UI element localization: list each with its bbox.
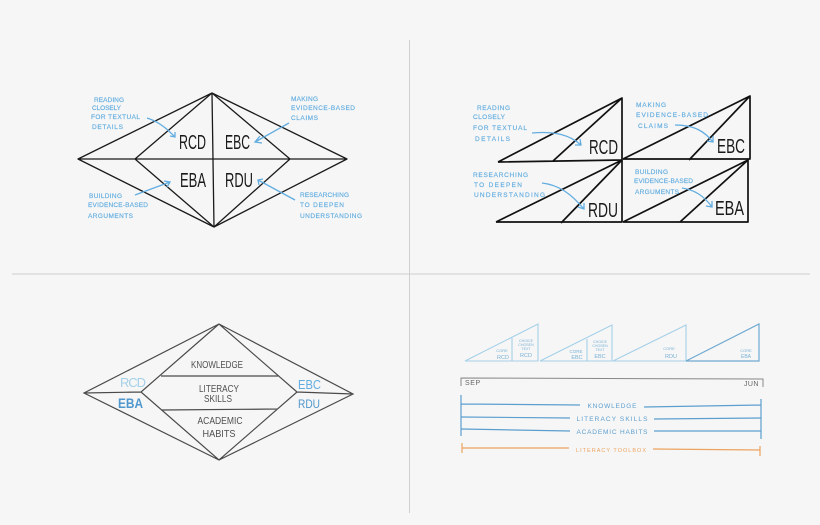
label: EBA: EBA: [118, 396, 143, 411]
panel: four triangles: [473, 96, 750, 223]
note: building evidence-based arguments: EVIDENCE-BASED: [88, 202, 148, 209]
note: researching to deepen understanding: UNDERSTANDING: [300, 213, 362, 220]
triangle: core and choice RCD: TEXT: [521, 347, 531, 351]
bar: literacy skills: LITERACY SKILLS: [576, 416, 648, 423]
triangle: EBA: [623, 160, 748, 222]
triangle: core and choice RCD: RCD: [497, 355, 509, 361]
panel: year timeline: [461, 324, 763, 456]
label: RCD: RCD: [589, 137, 618, 159]
triangle: core and choice EBC: CHOICE: [593, 340, 608, 344]
label: EBC: EBC: [717, 136, 745, 158]
triangle: core EBA: CORE: [740, 348, 752, 353]
bar: knowledge: KNOWLEDGE: [588, 403, 637, 410]
note: building evidence-based arguments: ARGUMENTS: [635, 189, 680, 196]
panel: diamond with four skill areas: [78, 93, 362, 227]
triangle: core and choice RCD: RCD: [520, 353, 532, 359]
note: making evidence-based claims: EVIDENCE-BASED: [636, 112, 708, 119]
label: JUN: JUN: [744, 381, 759, 388]
note: researching to deepen understanding: UNDERSTANDING: [474, 192, 545, 199]
note: researching to deepen understanding: TO DEEPEN: [300, 202, 344, 209]
timeline bracket: [461, 378, 763, 387]
note: building evidence-based arguments: BUILDING: [635, 169, 668, 176]
triangle: core EBA: [686, 324, 759, 361]
label: RCD: RCD: [120, 375, 146, 390]
label: RCD: RCD: [179, 132, 206, 154]
triangle: EBC: [623, 96, 750, 160]
note: building evidence-based arguments: EVIDENCE-BASED: [634, 178, 693, 185]
note: reading closely: DETAILS: [92, 124, 124, 131]
triangle: core RDU: [613, 325, 686, 361]
note: researching to deepen understanding: RESEARCHING: [473, 172, 528, 179]
triangle: core and choice RCD: CHOSEN: [518, 343, 534, 347]
arrow: to RCD: [147, 118, 175, 137]
note: researching to deepen understanding: TO DEEPEN: [474, 182, 522, 189]
label: RDU: RDU: [298, 397, 320, 411]
label: academic habits: ACADEMIC: [198, 415, 243, 427]
arrow: to EBC: [255, 123, 289, 143]
label: EBA: EBA: [715, 198, 744, 220]
bar: knowledge: [461, 395, 761, 439]
arrow: to RCD: [532, 132, 581, 145]
triangle: core and choice EBC: TEXT: [595, 348, 605, 352]
note: building evidence-based arguments: BUILDING: [89, 193, 122, 200]
arrow: to RDU: [258, 179, 295, 200]
label: EBC: EBC: [225, 132, 250, 154]
triangle: core and choice RCD: [465, 324, 538, 361]
diamond diagram: [84, 324, 353, 460]
note: building evidence-based arguments: ARGUMENTS: [88, 213, 134, 220]
label: RDU: RDU: [588, 200, 618, 222]
label: knowledge: KNOWLEDGE: [191, 359, 243, 371]
note: reading closely: FOR TEXTUAL: [473, 125, 527, 132]
note: making evidence-based claims: CLAIMS: [291, 115, 319, 122]
panel: diamond with knowledge, literacy skills, academic habits: [84, 324, 353, 460]
note: reading closely: CLOSELY: [92, 105, 122, 112]
triangle: core and choice RCD: CHOICE: [519, 339, 534, 343]
label: literacy skills: LITERACY: [199, 383, 239, 395]
arrow: to EBC: [675, 125, 713, 142]
note: making evidence-based claims: EVIDENCE-BASED: [291, 105, 355, 112]
triangle: core and choice EBC: CORE: [569, 349, 583, 354]
note: making evidence-based claims: MAKING: [636, 102, 666, 109]
label: EBC: EBC: [298, 378, 321, 392]
triangle: RCD: [498, 98, 622, 162]
note: reading closely: DETAILS: [475, 136, 511, 143]
label: RDU: RDU: [225, 170, 253, 192]
triangle: core RDU: RDU: [665, 354, 677, 360]
bar: academic habits: ACADEMIC HABITS: [576, 429, 648, 436]
triangle: core RDU: CORE: [663, 346, 675, 351]
note: reading closely: CLOSELY: [473, 114, 506, 121]
label: academic habits: HABITS: [202, 428, 236, 440]
note: reading closely: READING: [94, 97, 124, 104]
triangle: core and choice EBC: EBC: [594, 354, 606, 360]
note: reading closely: READING: [477, 105, 510, 112]
triangle: core and choice EBC: [540, 325, 612, 361]
label: SEP: SEP: [465, 380, 481, 387]
arrow: to RDU: [542, 183, 584, 209]
diamond diagram: [78, 93, 347, 227]
triangle: core EBA: EBA: [741, 354, 752, 360]
triangle: core and choice RCD: CORE: [496, 348, 508, 353]
bar: literacy toolbox: LITERACY TOOLBOX: [576, 448, 646, 454]
triangle: core and choice EBC: CHOSEN: [592, 344, 608, 348]
label: literacy skills: SKILLS: [204, 393, 232, 405]
note: making evidence-based claims: CLAIMS: [638, 123, 669, 130]
label: EBA: EBA: [180, 170, 206, 192]
bar: literacy toolbox: [462, 443, 760, 456]
note: researching to deepen understanding: RESEARCHING: [300, 192, 349, 199]
note: making evidence-based claims: MAKING: [291, 96, 318, 103]
note: reading closely: FOR TEXTUAL: [91, 114, 140, 121]
triangle: RDU: [496, 160, 622, 223]
arrow: to EBA: [135, 181, 170, 195]
arrow: to EBA: [682, 188, 712, 207]
triangle: core and choice EBC: EBC: [571, 355, 583, 361]
